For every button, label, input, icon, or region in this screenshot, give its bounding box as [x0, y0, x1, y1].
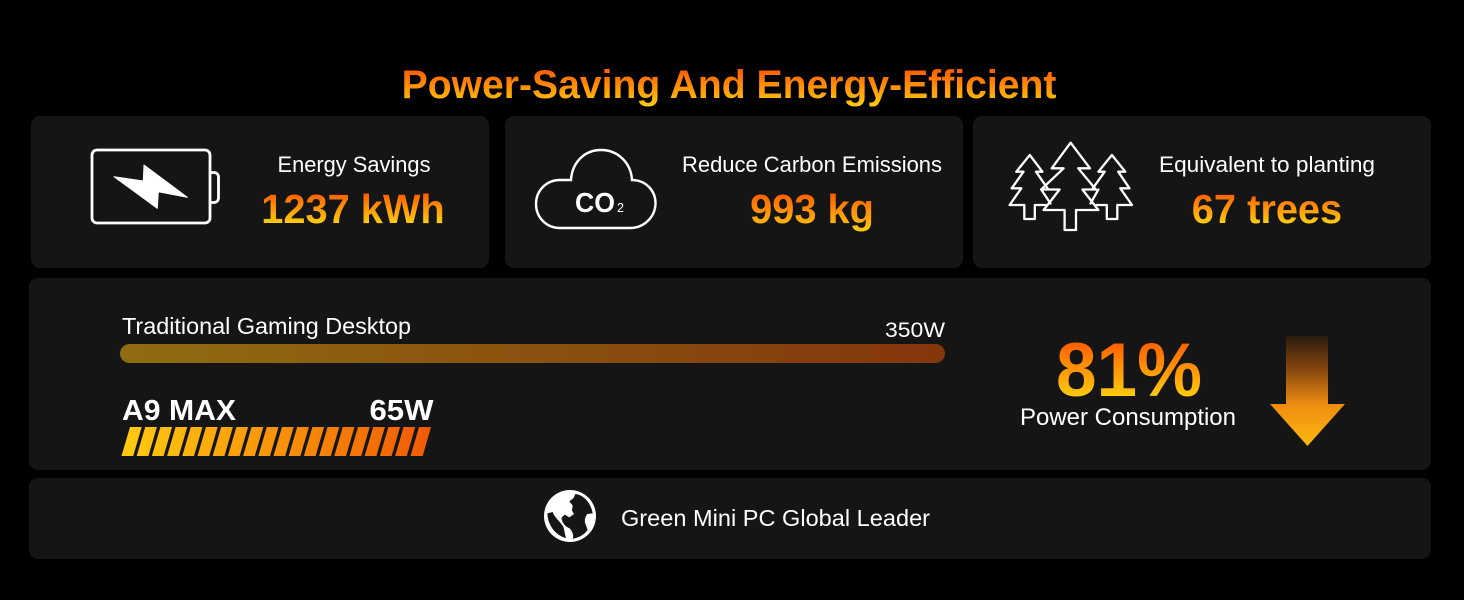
icon: globe: [544, 490, 596, 542]
panel: global leader: [29, 478, 1431, 559]
value: 1237 kWh: 1237 kWh: [261, 186, 445, 232]
arrow: down: [1270, 336, 1345, 446]
icon: battery: [92, 150, 218, 223]
icon: CO2 cloud: CO: [575, 187, 615, 218]
panel: energy savings: [31, 116, 489, 268]
title: Power-Saving And Energy-Efficient: [402, 62, 1056, 106]
icon: CO2 cloud: [536, 150, 656, 228]
value: 993 kg: 993 kg: [750, 186, 874, 232]
label: power consumption: Power Consumption: [1020, 404, 1236, 431]
label: A9 MAX: A9 MAX: [122, 395, 237, 427]
value: 65W: 65W: [370, 395, 434, 427]
icon: CO2 cloud: 2: [617, 201, 624, 215]
bar: traditional desktop: [120, 344, 945, 363]
panel: carbon emissions: [505, 116, 963, 268]
label: traditional gaming desktop: Traditional Gaming Desktop: [122, 313, 411, 339]
bar: A9 MAX stripes: [122, 427, 431, 456]
icon: three trees: [1010, 143, 1132, 230]
value: 350W: 350W: [885, 319, 945, 342]
label: reduce carbon emissions: Reduce Carbon Emissions: [682, 152, 942, 177]
label: energy savings: Energy Savings: [278, 152, 430, 177]
label: green mini pc global leader: Green Mini PC Global Leader: [621, 505, 930, 531]
value: 67 trees: 67 trees: [1192, 186, 1342, 232]
panel: trees: [973, 116, 1431, 268]
label: equivalent to planting: Equivalent to planting: [1159, 152, 1375, 177]
panel: power comparison: [29, 278, 1431, 470]
